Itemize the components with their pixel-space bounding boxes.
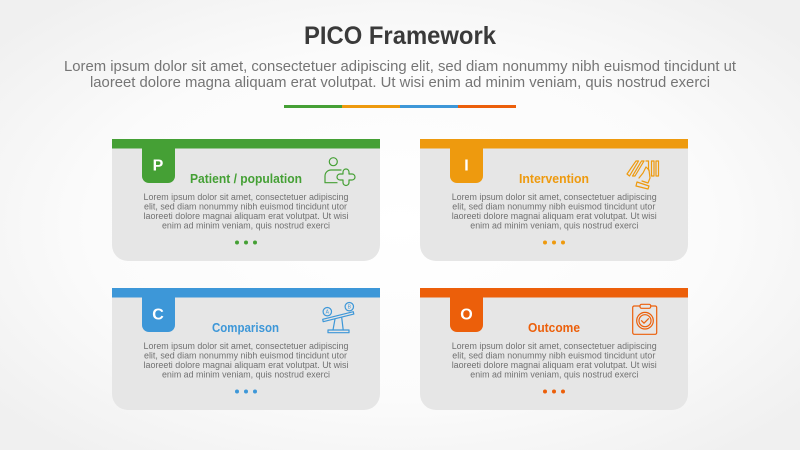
icon: clipboard with check: [633, 304, 657, 334]
letter I: I: [464, 158, 469, 174]
panel: comparison: [112, 288, 380, 410]
body text: laoreeti dolore magnai aliquam erat volutpat. Ut wisi: [452, 211, 657, 221]
body text: Lorem ipsum dolor sit amet, consectetuer adipiscing: [144, 192, 348, 202]
body text: enim ad minim veniam, quis nostrud exerci: [162, 370, 330, 380]
body text: laoreeti dolore magnai aliquam erat volutpat. Ut wisi: [452, 360, 657, 370]
letter C: C: [152, 306, 164, 324]
heading: Intervention: [519, 172, 589, 186]
body text: [452, 341, 657, 380]
title: PICO Framework: [304, 22, 496, 50]
body text: Lorem ipsum dolor sit amet, consectetuer adipiscing: [452, 192, 657, 202]
subtitle text: laoreet dolore magna aliquam erat volutpat. Ut wisi enim ad minim veniam, quis nostrud exerci: [90, 75, 710, 91]
body text: enim ad minim veniam, quis nostrud exerci: [470, 220, 638, 230]
body text: laoreeti dolore magnai aliquam erat volutpat. Ut wisi: [144, 211, 348, 221]
body text: laoreeti dolore magnai aliquam erat volutpat. Ut wisi: [144, 360, 348, 370]
icon: seesaw balance: [323, 302, 354, 333]
body text: [144, 192, 348, 230]
subtitle text: Lorem ipsum dolor sit amet, consectetuer adipiscing elit, sed diam nonummy nibh euismod tincidunt ut: [64, 59, 736, 75]
panel: intervention: [420, 139, 688, 261]
body text: elit, sed diam nonummy nibh euismod tincidunt utor: [144, 350, 347, 360]
letter O: O: [460, 306, 473, 324]
panel: patient / population: [112, 139, 380, 261]
body text: [452, 192, 657, 230]
body text: elit, sed diam nonummy nibh euismod tincidunt utor: [144, 202, 347, 212]
body text: Lorem ipsum dolor sit amet, consectetuer adipiscing: [452, 341, 657, 351]
icon: seesaw balance: A: [326, 310, 330, 316]
dots: [235, 390, 257, 394]
subtitle text: [64, 59, 736, 91]
body text: elit, sed diam nonummy nibh euismod tincidunt utor: [452, 350, 655, 360]
icon: seesaw balance: B: [348, 304, 352, 310]
body text: [144, 341, 348, 380]
colour divider: [284, 105, 516, 108]
heading: Outcome: [528, 321, 580, 335]
letter P: P: [153, 158, 164, 174]
heading: Patient / population: [190, 172, 302, 186]
icon: person with plus: [325, 158, 355, 186]
dots: [543, 390, 565, 394]
body text: enim ad minim veniam, quis nostrud exerci: [162, 220, 330, 230]
heading: Comparison: [212, 321, 279, 335]
dots: [235, 240, 257, 244]
body text: Lorem ipsum dolor sit amet, consectetuer adipiscing: [144, 341, 348, 351]
body text: elit, sed diam nonummy nibh euismod tincidunt utor: [452, 202, 655, 212]
icon: hand with stacked bars: [627, 161, 658, 189]
dots: [543, 240, 565, 244]
body text: enim ad minim veniam, quis nostrud exerci: [470, 370, 638, 380]
panel: outcome: [420, 288, 688, 410]
